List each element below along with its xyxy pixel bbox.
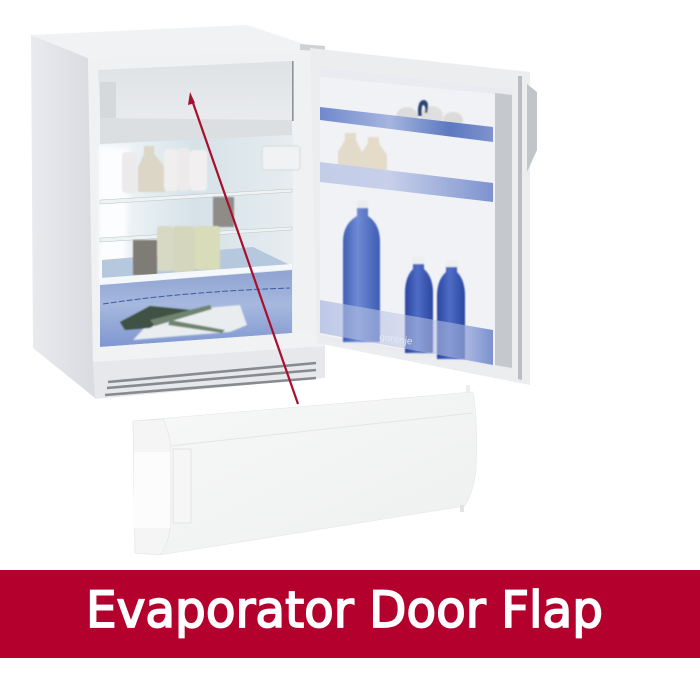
door shelf bottom: gorenje [379, 332, 414, 348]
evaporator door flap part [133, 385, 477, 555]
fridge interior [99, 133, 293, 348]
flap pegs [466, 385, 470, 394]
ventilation slats [105, 363, 316, 395]
title banner: Evaporator Door Flap [86, 581, 603, 639]
fridge cabinet [31, 25, 325, 399]
flap white block [134, 452, 170, 528]
door shelf middle with jars [320, 133, 493, 202]
small blue bottles [405, 257, 465, 359]
lower shelf jars [157, 226, 220, 272]
glass shelves [100, 189, 292, 278]
door shelf top with items [320, 100, 493, 142]
flap body [133, 392, 477, 555]
title banner [0, 570, 700, 658]
flap peg lower [460, 505, 464, 512]
arrow pointing to evaporator flap [188, 92, 298, 404]
interior light housing [262, 146, 300, 170]
fridge illustration [31, 25, 537, 399]
door shelf bottom [320, 300, 493, 365]
frame under drawer [93, 332, 325, 362]
bottom glass shelf [100, 264, 292, 285]
flap handle recess [173, 449, 191, 523]
open refrigerator door [310, 48, 537, 385]
metal can lower [133, 240, 157, 275]
flap hinge band line [170, 413, 473, 446]
metal can upper [213, 197, 234, 227]
evaporator compartment with flap [98, 61, 294, 144]
rear wall glow behind shelves [100, 148, 130, 280]
flap end cap [133, 419, 170, 555]
large blue bottle [343, 200, 380, 342]
upper shelf bottles [122, 146, 207, 193]
vegetable crisper drawer [100, 270, 292, 347]
